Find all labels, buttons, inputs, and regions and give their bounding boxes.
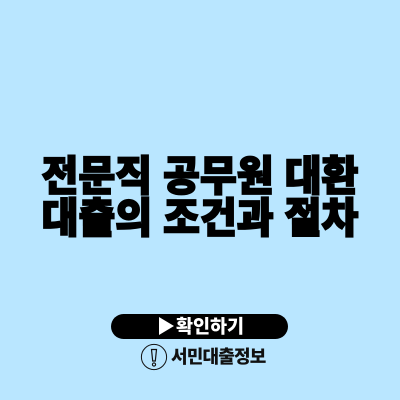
button label: 확인하기 (176, 316, 244, 337)
title line 2: 대출의 조건과 절차 (42, 196, 358, 242)
brand name: 서민대출정보 (171, 347, 266, 367)
button: confirm (111, 314, 288, 339)
title line 1: 전문직 공무원 대환 (42, 154, 358, 200)
icon: exclamation circle (140, 344, 168, 370)
title (41, 154, 358, 242)
icon: play triangle (159, 317, 174, 335)
